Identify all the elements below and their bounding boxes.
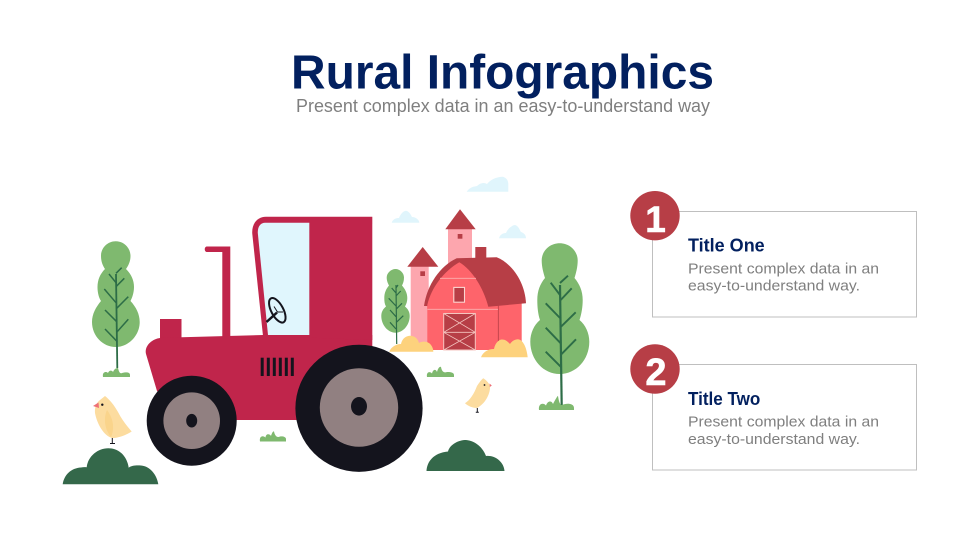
icon: grass middle: [427, 367, 454, 377]
exhaust pipe: [205, 246, 230, 337]
icon: bush left: [63, 448, 158, 484]
text block: Present complex data in an: [688, 414, 879, 431]
icon: right tree: [530, 243, 589, 407]
icon: hay left: [389, 336, 433, 352]
text block: easy-to-understand way.: [688, 278, 860, 295]
icon: hay right: [481, 339, 528, 357]
tractor body: [146, 335, 372, 420]
number badge: [630, 344, 680, 394]
heading: Title One: [688, 236, 765, 256]
heading: Title Two: [688, 389, 760, 409]
subtitle: Present complex data in an easy-to-understand way: [296, 96, 710, 116]
icon: steering wheel: [266, 296, 289, 325]
icon: chick right: [465, 378, 492, 412]
panel: item one: [630, 191, 916, 317]
icon: bush right: [426, 440, 504, 471]
icon: grass right tree: [539, 396, 574, 410]
box: [652, 364, 916, 470]
icon: barn: [424, 247, 526, 350]
icon: grass left tree: [103, 368, 130, 377]
text block: easy-to-understand way.: [688, 431, 860, 448]
icon: left tree: [92, 241, 140, 368]
exhaust box: [160, 319, 182, 341]
big wheel: [295, 345, 423, 472]
box: [652, 212, 916, 317]
grille: [261, 358, 294, 376]
icon: tall silo: [445, 209, 476, 265]
number badge: [630, 191, 680, 240]
text block: Present complex data in an: [688, 260, 879, 277]
number: 1: [645, 199, 666, 240]
icon: clouds: [392, 177, 526, 238]
title: Rural Infographics: [291, 46, 714, 100]
icon: left silo: [407, 247, 438, 344]
window: [258, 223, 309, 335]
number: 2: [645, 352, 667, 394]
icon: small tree behind barn: [381, 269, 410, 344]
cab: [252, 217, 372, 340]
illustration: rural scene: [63, 177, 589, 484]
panel: item two: [630, 344, 916, 470]
tractor: [146, 217, 423, 472]
icon: grass under tractor: [260, 431, 286, 442]
small wheel: [147, 376, 237, 466]
icon: chick left: [93, 396, 132, 444]
